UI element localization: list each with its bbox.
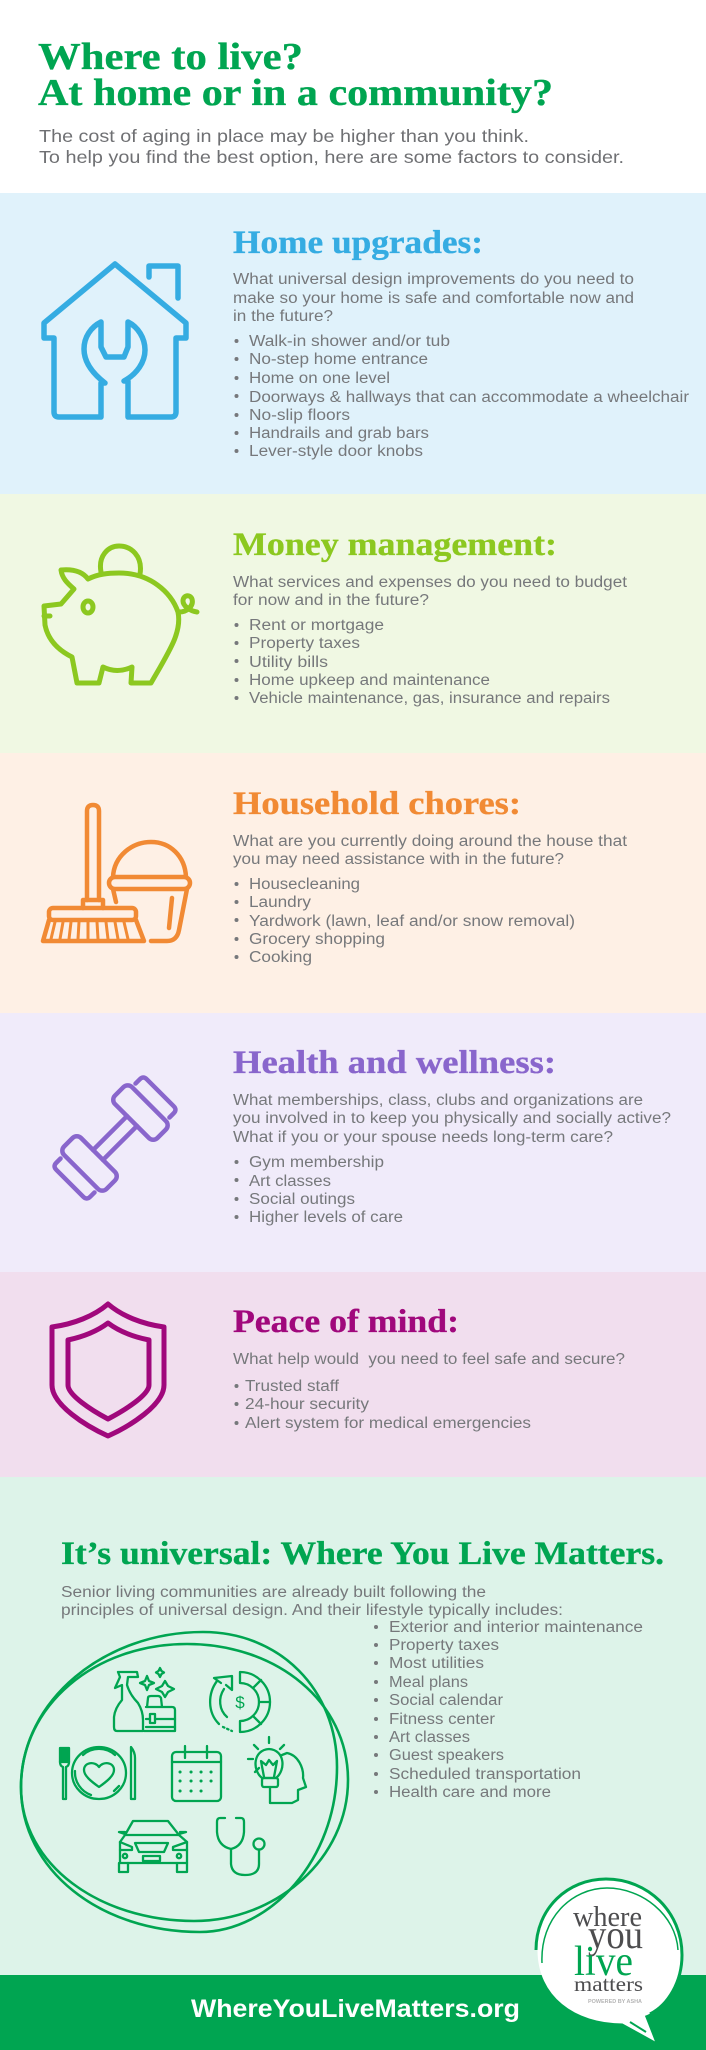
footer band bbox=[0, 1975, 706, 2050]
website address: WhereYouLiveMatters.org bbox=[191, 1995, 520, 2023]
question text: you may need assistance with in the future? bbox=[233, 851, 564, 868]
bullet list: Exterior and interior maintenance bbox=[389, 1619, 643, 1636]
question text: What help would you need to feel safe and secure? bbox=[233, 1351, 625, 1368]
logo wordmark: you bbox=[588, 1912, 643, 1957]
icon: dumbbell bbox=[49, 1072, 181, 1204]
bullet list: Home on one level bbox=[249, 370, 390, 387]
icon group: lifestyle circle bbox=[21, 1632, 348, 1932]
bullet list: Yardwork (lawn, leaf and/or snow removal) bbox=[249, 913, 575, 930]
bullet list: No-step home entrance bbox=[249, 351, 428, 368]
introduction text bbox=[39, 126, 624, 167]
bullet list: Grocery shopping bbox=[249, 931, 385, 948]
bullet list: Art classes bbox=[249, 1173, 331, 1190]
icon: piggy bank bbox=[44, 546, 197, 683]
bullet list: Doorways & hallways that can accommodate a wheelchair bbox=[249, 389, 689, 406]
icon: light bulb and head bbox=[248, 1737, 306, 1803]
bullet list: Alert system for medical emergencies bbox=[245, 1415, 531, 1432]
logo wordmark: live bbox=[574, 1939, 633, 1985]
bullet list bbox=[234, 617, 610, 707]
bullet list: Handrails and grab bars bbox=[249, 425, 429, 442]
heading: Home upgrades: bbox=[233, 225, 483, 261]
icon: recurring dollar ring bbox=[210, 1672, 270, 1732]
paragraph: Senior living communities are already built following the bbox=[61, 1584, 486, 1601]
logo wordmark: matters bbox=[574, 1972, 643, 1996]
question text: for now and in the future? bbox=[233, 592, 429, 609]
paragraph: principles of universal design. And their lifestyle typically includes: bbox=[61, 1602, 563, 1619]
bullet list bbox=[234, 876, 575, 966]
bullet list: Trusted staff bbox=[245, 1378, 340, 1395]
bullet list: Walk-in shower and/or tub bbox=[249, 333, 450, 350]
icon: shield bbox=[52, 1304, 164, 1436]
question text: What are you currently doing around the house that bbox=[233, 833, 628, 850]
introduction text: To help you find the best option, here are some factors to consider. bbox=[39, 147, 624, 167]
question text: What memberships, class, clubs and organizations are bbox=[233, 1092, 643, 1109]
panel: money management bbox=[0, 494, 706, 753]
icon: house with wrench bbox=[44, 264, 186, 417]
title: At home or in a community? bbox=[38, 72, 553, 114]
bullet list: Property taxes bbox=[389, 1637, 499, 1654]
logo: speech bubble bbox=[536, 1879, 682, 2038]
bullet list: Most utilities bbox=[389, 1655, 484, 1672]
question text bbox=[233, 271, 634, 325]
bullet list: Social outings bbox=[249, 1191, 355, 1208]
bullet list: Laundry bbox=[249, 894, 311, 911]
logo wordmark: where bbox=[573, 1902, 642, 1933]
bullet list: Housecleaning bbox=[249, 876, 360, 893]
heading: Health and wellness: bbox=[233, 1045, 556, 1081]
bullet list: Home upkeep and maintenance bbox=[249, 672, 490, 689]
panel: health and wellness bbox=[0, 1013, 706, 1272]
bullet list bbox=[234, 333, 689, 460]
question text bbox=[233, 833, 628, 868]
question text bbox=[233, 1092, 671, 1146]
question text: in the future? bbox=[233, 308, 333, 325]
bullet list bbox=[234, 1154, 403, 1226]
logo wordmark bbox=[573, 1902, 643, 2005]
double circle outline bbox=[21, 1632, 348, 1932]
bullet list: Utility bills bbox=[249, 654, 328, 671]
panel: household chores bbox=[0, 753, 706, 1013]
panel: home upgrades bbox=[0, 193, 706, 494]
bullet list bbox=[234, 1378, 531, 1432]
paragraph bbox=[61, 1584, 563, 1619]
introduction text: The cost of aging in place may be higher than you think. bbox=[39, 126, 529, 146]
panel: peace of mind bbox=[0, 1272, 706, 1477]
bullet list: Gym membership bbox=[249, 1154, 384, 1171]
bullet list: 24-hour security bbox=[245, 1396, 369, 1413]
icon: plate with heart, fork and knife bbox=[60, 1747, 135, 1799]
bullet list: Vehicle maintenance, gas, insurance and repairs bbox=[249, 690, 610, 707]
bullet list: Art classes bbox=[389, 1729, 470, 1746]
question text: make so your home is safe and comfortable now and bbox=[233, 290, 634, 307]
icon: recurring dollar ring: $ bbox=[235, 1693, 245, 1712]
title: Where to live? bbox=[38, 36, 303, 78]
title bbox=[38, 36, 553, 114]
question text: What universal design improvements do you need to bbox=[233, 271, 634, 288]
bullet list: Scheduled transportation bbox=[389, 1766, 581, 1783]
header: title and introduction bbox=[38, 36, 624, 167]
icon: spray bottle and toolbox bbox=[114, 1668, 175, 1731]
heading: Household chores: bbox=[233, 786, 521, 822]
question text bbox=[233, 574, 628, 609]
bullet list: Health care and more bbox=[389, 1784, 551, 1801]
bullet list: Higher levels of care bbox=[249, 1209, 403, 1226]
bullet list: Rent or mortgage bbox=[249, 617, 384, 634]
question text: you involved in to keep you physically and socially active? bbox=[233, 1110, 671, 1127]
question text: What if you or your spouse needs long-term care? bbox=[233, 1129, 613, 1146]
bullet list: Property taxes bbox=[249, 635, 360, 652]
bullet list: Cooking bbox=[249, 949, 312, 966]
heading: Peace of mind: bbox=[233, 1304, 459, 1340]
heading: Money management: bbox=[233, 527, 557, 563]
bullet list: Guest speakers bbox=[389, 1747, 504, 1764]
bullet list: Meal plans bbox=[389, 1674, 468, 1691]
bullet list: No-slip floors bbox=[249, 407, 350, 424]
icon: stethoscope bbox=[217, 1818, 264, 1875]
panel: it's universal bbox=[0, 1477, 706, 1975]
bullet list: Social calendar bbox=[389, 1692, 503, 1709]
bullet list bbox=[374, 1619, 643, 1801]
icon: broom and bucket bbox=[43, 805, 190, 941]
bullet list: Fitness center bbox=[389, 1711, 495, 1728]
bullet list: Lever-style door knobs bbox=[249, 443, 423, 460]
icon: calendar bbox=[172, 1746, 221, 1801]
icon: car bbox=[119, 1821, 187, 1872]
question text: What services and expenses do you need to budget bbox=[233, 574, 628, 591]
logo wordmark: POWERED BY ASHA bbox=[588, 1999, 642, 2005]
heading: It’s universal: Where You Live Matters. bbox=[61, 1536, 664, 1572]
